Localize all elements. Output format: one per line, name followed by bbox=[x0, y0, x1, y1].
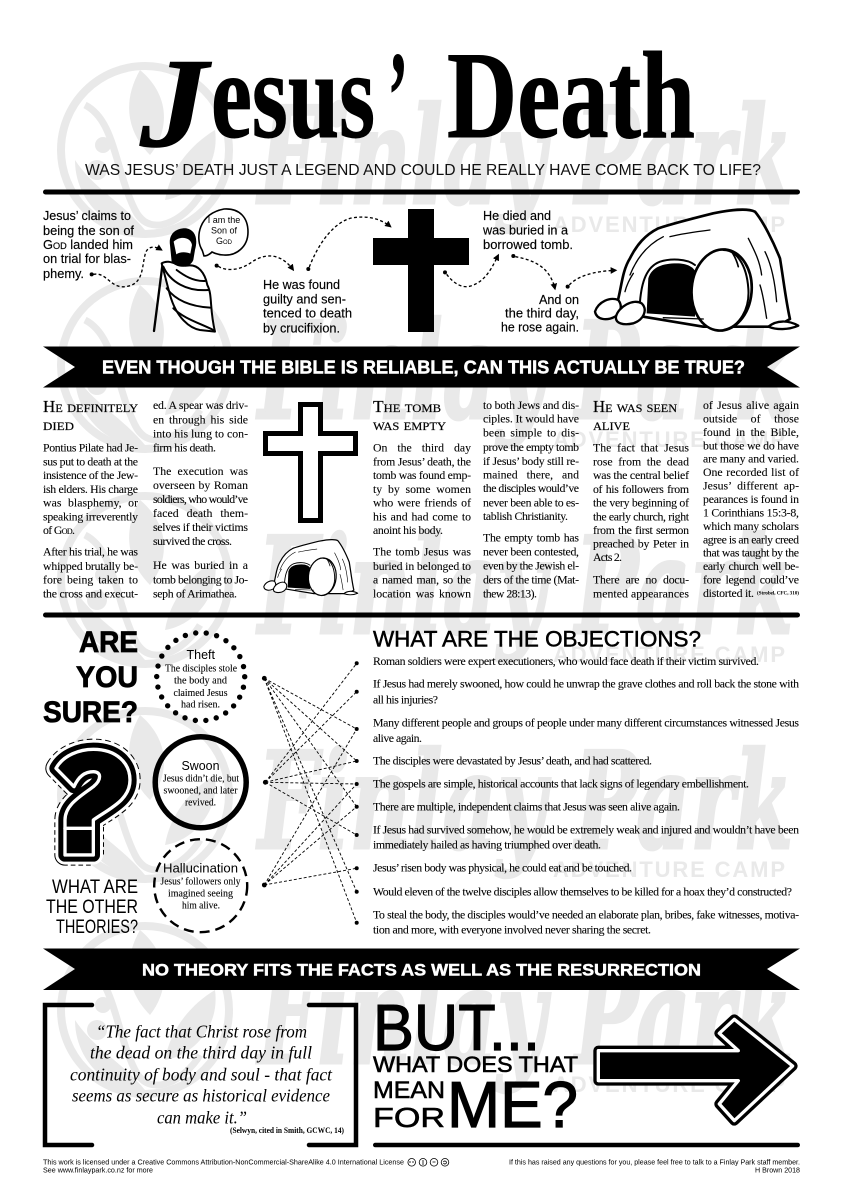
text: buried bbox=[482, 209, 573, 252]
watermark: repeated Finlay Park Adventure Camp logo: ADVENTURE CAMP bbox=[553, 1072, 785, 1097]
body text bbox=[373, 398, 579, 600]
body text: early church well be- bbox=[703, 559, 799, 573]
body text: tablish Christianity. bbox=[483, 509, 568, 523]
panel: quote bbox=[45, 1005, 356, 1145]
icon: Jesus figure bbox=[154, 228, 215, 332]
objections list: Jesus’ risen body was physical, he could eat and be touched. bbox=[373, 861, 632, 875]
objections list: To steal the body, the disciples would’ve needed an elaborate plan, bribes, fake witnesses, motiva- bbox=[373, 908, 799, 922]
heading: was empty bbox=[373, 415, 446, 434]
body text: are many and varied. bbox=[703, 452, 799, 466]
text: found guilty: tenced to death bbox=[263, 306, 352, 320]
heading bbox=[593, 397, 677, 434]
title: Death bbox=[447, 27, 695, 164]
body text: mented appearances bbox=[593, 586, 689, 600]
quotation text: seems as secure as historical evidence bbox=[72, 1086, 330, 1106]
text: found guilty bbox=[263, 278, 352, 336]
objections list: If Jesus had survived somehow, he would be extremely weak and injured and wouldn’t have been bbox=[373, 823, 799, 837]
body text: of Jesus alive again bbox=[703, 398, 799, 412]
icon: question mark bbox=[56, 749, 130, 855]
body text: firm his death. bbox=[153, 441, 216, 455]
body text: insistence of the Jew- bbox=[43, 468, 138, 482]
heading: are you sure: ARE bbox=[79, 626, 138, 659]
body text: distorted it. bbox=[703, 586, 754, 600]
objections list: Roman soldiers were expert executioners, who would face death if their victim survived. bbox=[373, 654, 759, 668]
theory: theft bbox=[157, 633, 245, 721]
text: claims to being the son of God bbox=[43, 209, 134, 281]
body text: seph of Arimathea. bbox=[153, 586, 237, 600]
body text: ders of the time (Mat- bbox=[483, 572, 579, 586]
body text: if Jesus’ body still re- bbox=[483, 454, 579, 468]
quotation text: “The fact that Christ rose from bbox=[96, 1022, 307, 1042]
body text: en through his side bbox=[153, 412, 248, 426]
icon: small tomb bbox=[264, 540, 358, 597]
body text: The execution was bbox=[153, 464, 248, 478]
theory: hallucination bbox=[154, 839, 247, 932]
body text: The fact that Jesus bbox=[593, 441, 689, 455]
footer: contact note: H Brown 2018 bbox=[755, 1166, 800, 1175]
heading: alive bbox=[593, 415, 630, 434]
text: rose again: And on bbox=[539, 293, 579, 307]
speech bubble bbox=[199, 209, 248, 256]
body text: never been able to es- bbox=[483, 496, 579, 510]
text: found guilty: He was found bbox=[263, 278, 340, 292]
body text: survived the cross. bbox=[153, 534, 232, 548]
body text: but those we do have bbox=[703, 438, 799, 452]
body text: (Strobel, CFC, 310) bbox=[757, 590, 799, 596]
body text: found in the Bible, bbox=[703, 425, 799, 439]
speech bubble: God bbox=[216, 236, 233, 246]
body text: preached by Peter in bbox=[593, 536, 689, 550]
objections list: There are multiple, independent claims that Jesus was seen alive again. bbox=[373, 800, 680, 814]
footer: licence: This work is licensed under a Creative Commons Attribution-NonCommercial-ShareAlike 4.0 International License bbox=[43, 1157, 404, 1166]
watermark: repeated Finlay Park Adventure Camp logo: ADVENTURE CAMP bbox=[553, 427, 785, 452]
panel: the tomb was empty bbox=[373, 397, 579, 600]
body text: ish elders. His charge bbox=[43, 482, 138, 496]
body text: which many scholars bbox=[703, 519, 799, 533]
quotation text: continuity of body and soul - that fact bbox=[70, 1065, 333, 1085]
body text: the disciples would’ve bbox=[483, 481, 579, 495]
icon: empty tomb bbox=[595, 210, 798, 333]
theory: hallucination: Hallucination bbox=[163, 861, 238, 875]
objections list: all his injuries? bbox=[373, 693, 438, 707]
body text: The empty tomb has bbox=[483, 531, 579, 545]
panel: but what does that mean for me: WHAT DOES THAT bbox=[373, 1052, 578, 1077]
theory: hallucination: him alive. bbox=[182, 900, 220, 911]
text: claims to being the son of God: being the son of bbox=[43, 224, 134, 238]
body text: of his followers from bbox=[593, 482, 689, 496]
text: rose again bbox=[501, 293, 579, 334]
body text: He was buried in a bbox=[153, 558, 249, 572]
theory: theft: the body and bbox=[174, 676, 228, 686]
body text: overseen by Roman bbox=[153, 478, 248, 492]
body text: the early church, right bbox=[593, 509, 690, 523]
chart: theories connected to objections bbox=[262, 661, 359, 925]
objections list: alive again. bbox=[373, 731, 422, 745]
heading: He definitely bbox=[43, 397, 138, 416]
body text: rose from the dead bbox=[593, 454, 689, 468]
body text: even by the Jewish el- bbox=[483, 558, 579, 572]
icon: big arrow bbox=[598, 1019, 793, 1121]
text: rose again: he rose again. bbox=[501, 320, 579, 334]
footer: licence bbox=[43, 1157, 404, 1175]
text: found guilty: guilty and sen- bbox=[263, 292, 346, 306]
text: buried: borrowed tomb. bbox=[483, 238, 573, 252]
arrow: guilty to cross bbox=[306, 217, 391, 271]
watermark: repeated Finlay Park Adventure Camp logo: ADVENTURE CAMP bbox=[553, 642, 785, 667]
speech bubble: I am the bbox=[208, 215, 240, 225]
panel: he was seen alive bbox=[593, 397, 799, 600]
body text: The tomb Jesus was bbox=[373, 545, 471, 559]
speech bubble: Son of bbox=[211, 226, 238, 236]
body text: There are no docu- bbox=[593, 572, 689, 586]
body text: his and had come to bbox=[373, 509, 471, 523]
title: J bbox=[139, 32, 212, 174]
banner: even though the Bible is reliable: EVEN THOUGH THE BIBLE IS RELIABLE, CAN THIS ACTUALLY BE TRUE? bbox=[102, 358, 745, 378]
body text: tomb was found emp- bbox=[373, 468, 471, 482]
quotation text: the dead on the third day in full bbox=[90, 1042, 312, 1062]
quotation text: can make it.” bbox=[157, 1107, 247, 1127]
body text: was the central belief bbox=[593, 468, 689, 482]
body text: ciples. It would have bbox=[483, 412, 579, 426]
body text: selves if their victims bbox=[153, 520, 248, 534]
icons: creative commons bbox=[408, 1158, 449, 1166]
theory: theft: Theft bbox=[186, 648, 216, 662]
body text: outside of those bbox=[703, 411, 799, 425]
heading: are you sure: YOU bbox=[76, 661, 138, 694]
banner: even though the Bible is reliable bbox=[43, 346, 800, 388]
body text: prove the empty tomb bbox=[483, 440, 579, 454]
brackets bbox=[45, 1005, 356, 1145]
body text: whipped brutally be- bbox=[43, 559, 138, 573]
body text: Pontius Pilate had Je- bbox=[43, 441, 138, 455]
panel: but what does that mean for me: FOR bbox=[373, 1102, 445, 1133]
body text: who were friends of bbox=[373, 496, 471, 510]
body text: ed. A spear was driv- bbox=[153, 398, 248, 412]
theory: theft: The disciples stole bbox=[165, 664, 237, 675]
body text bbox=[593, 398, 799, 600]
body text: mained there, and bbox=[483, 467, 579, 481]
body text: agree is an early creed bbox=[703, 532, 799, 546]
body text: thew 28:13). bbox=[483, 586, 537, 600]
theory: swoon: swooned, and later bbox=[164, 785, 238, 796]
body text: that was taught by the bbox=[703, 546, 799, 560]
body text: 1 Corinthians 15:3-8, bbox=[703, 505, 799, 519]
body text: the cross and execut- bbox=[43, 586, 138, 600]
body text: ty by some women bbox=[373, 482, 471, 496]
panel: but what does that mean for me: MEAN bbox=[373, 1077, 445, 1104]
heading: are you sure bbox=[43, 626, 138, 729]
theory: hallucination: imagined seeing bbox=[168, 889, 234, 900]
text: rose again: the third day, bbox=[505, 306, 579, 320]
text: what are the other theories: THEORIES? bbox=[56, 917, 138, 938]
arrow: claims to Jesus bbox=[90, 247, 162, 287]
heading bbox=[373, 397, 446, 434]
body text: speaking irreverently bbox=[43, 509, 138, 523]
banner: no theory fits the facts: NO THEORY FITS THE FACTS AS WELL AS THE RESURRECTION bbox=[142, 960, 701, 980]
icon: black cross bbox=[373, 209, 469, 332]
arrow: cross to burial bbox=[443, 255, 498, 287]
theory: theft: had risen. bbox=[181, 700, 220, 710]
body text: to both Jews and dis- bbox=[483, 398, 579, 412]
body text: location was known bbox=[373, 586, 471, 600]
body text: faced death them- bbox=[153, 506, 248, 520]
heading: He was seen bbox=[593, 397, 677, 416]
arrow: burial to third day bbox=[511, 254, 555, 289]
body text: soldiers, who would’ve bbox=[153, 492, 248, 506]
body text: was blasphemy, or bbox=[43, 496, 138, 510]
body text: After his trial, he was bbox=[43, 545, 138, 559]
quotation text bbox=[70, 1022, 344, 1135]
text: claims to being the son of God: on trial for blas- bbox=[43, 252, 131, 266]
body text: from the first sermon bbox=[593, 523, 689, 537]
body text: On the third day bbox=[373, 441, 471, 455]
body text: the very beginning of bbox=[593, 496, 689, 510]
body text: anoint his body. bbox=[373, 523, 443, 537]
panel: but what does that mean for me: ME? bbox=[447, 1068, 578, 1141]
panel: but what does that mean for me bbox=[373, 991, 800, 1147]
panel: what are the objections bbox=[373, 627, 799, 937]
watermark: repeated Finlay Park Adventure Camp logo: ADVENTURE CAMP bbox=[553, 857, 785, 882]
theory: swoon: Jesus didn’t die, but bbox=[163, 774, 239, 785]
text: found guilty: by crucifixion. bbox=[263, 322, 340, 336]
body text: fore being taken to bbox=[43, 572, 138, 586]
footer: contact note: If this has raised any questions for you, please feel free to talk to a Finlay Park staff member. bbox=[509, 1157, 800, 1166]
text: what are the other theories: THE OTHER bbox=[46, 897, 138, 918]
body text: from Jesus’ death, the bbox=[373, 454, 471, 468]
quotation text: (Selwyn, cited in Smith, GCWC, 14) bbox=[230, 1126, 344, 1135]
body text: Jesus’ different ap- bbox=[703, 479, 799, 493]
watermark: repeated Finlay Park Adventure Camp logo bbox=[61, 66, 793, 1097]
objections list: Would eleven of the twelve disciples allow themselves to be killed for a hoax they’d constructed? bbox=[373, 885, 792, 899]
theory: swoon: revived. bbox=[185, 797, 216, 808]
objections list bbox=[373, 654, 799, 937]
text: buried: He died and bbox=[483, 209, 551, 223]
body text bbox=[43, 398, 249, 600]
text: claims to being the son of God: God landed him bbox=[43, 238, 133, 252]
icon: outlined cross bbox=[266, 404, 356, 520]
text: claims to being the son of God: Jesus’ claims to bbox=[43, 209, 131, 223]
theory: swoon: Swoon bbox=[182, 759, 220, 773]
theory: hallucination: Jesus’ followers only bbox=[160, 876, 241, 887]
body text: fore legend could’ve bbox=[703, 573, 799, 587]
body text: buried in belonged to bbox=[373, 559, 471, 573]
panel: he definitely died bbox=[43, 397, 249, 600]
body text: a named man, so the bbox=[373, 572, 471, 586]
body text: been simple to dis- bbox=[483, 426, 579, 440]
objections list: Many different people and groups of people under many different circumstances witnessed Jesus bbox=[373, 716, 799, 730]
body text: Acts 2. bbox=[593, 550, 622, 564]
heading: are you sure: SURE? bbox=[43, 696, 138, 729]
panel: but what does that mean for me: BUT... bbox=[373, 991, 540, 1064]
body text: tomb belonging to Jo- bbox=[153, 572, 248, 586]
objections list: The disciples were devastated by Jesus’ death, and had scattered. bbox=[373, 754, 652, 768]
body text: into his lung to con- bbox=[153, 427, 248, 441]
heading: WHAT ARE THE OBJECTIONS? bbox=[373, 627, 701, 652]
heading: The tomb bbox=[373, 397, 441, 416]
footer: contact note bbox=[509, 1157, 800, 1175]
objections list: tion and more, with everyone involved never sharing the secret. bbox=[373, 923, 651, 937]
body text: never been contested, bbox=[483, 544, 579, 558]
theory: swoon bbox=[155, 737, 246, 828]
body text: of God. bbox=[43, 523, 75, 537]
title: ’ bbox=[388, 27, 408, 164]
title: esus bbox=[211, 27, 375, 164]
text: what are the other theories: WHAT ARE bbox=[52, 877, 138, 898]
heading: died bbox=[43, 415, 74, 434]
watermark: repeated Finlay Park Adventure Camp logo: ADVENTURE CAMP bbox=[553, 212, 785, 237]
footer: licence: See www.finlaypark.co.nz for more bbox=[43, 1166, 153, 1175]
panel: story flow bbox=[43, 209, 798, 336]
subtitle: WAS JESUS’ DEATH JUST A LEGEND AND COULD HE REALLY HAVE COME BACK TO LIFE? bbox=[85, 162, 761, 179]
body text: One recorded list of bbox=[703, 465, 799, 479]
arrow: Jesus to guilty bbox=[215, 256, 293, 270]
body text: sus put to death at the bbox=[43, 454, 138, 468]
objections list: The gospels are simple, historical accounts that lack signs of legendary embellishment. bbox=[373, 777, 749, 791]
objections list: If Jesus had merely swooned, how could he unwrap the grave clothes and roll back the stone with bbox=[373, 677, 799, 691]
text: claims to being the son of God: phemy. bbox=[43, 267, 84, 281]
banner: no theory fits the facts bbox=[43, 948, 800, 990]
text: what are the other theories bbox=[46, 877, 138, 938]
arrow: third day to tomb bbox=[566, 270, 616, 289]
heading bbox=[43, 397, 138, 434]
body text: pearances is found in bbox=[703, 492, 799, 506]
objections list: immediately hailed as having triumphed over death. bbox=[373, 838, 601, 852]
title bbox=[139, 27, 695, 174]
text: buried: was buried in a bbox=[482, 224, 568, 238]
theory: theft: claimed Jesus bbox=[174, 688, 228, 699]
